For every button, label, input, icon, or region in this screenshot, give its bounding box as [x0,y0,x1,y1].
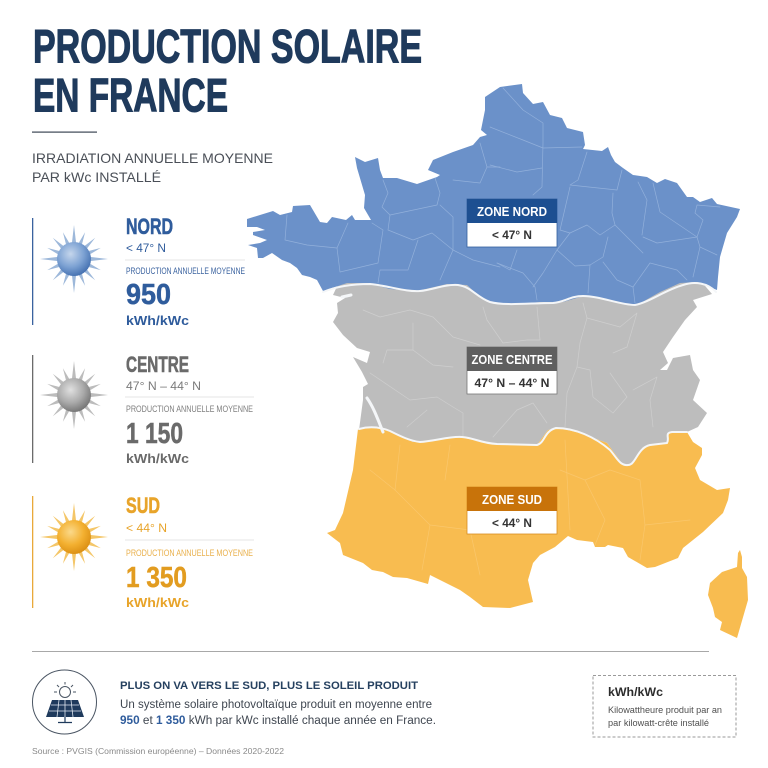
subtitle: IRRADIATION ANNUELLE MOYENNE [32,150,273,166]
panel: zone sud: < 44° N [126,521,167,535]
department borders centre [363,303,657,437]
department borders sud [370,440,690,575]
panel: zone nord: kWh/kWc [126,313,189,328]
title: EN FRANCE [33,68,228,122]
panel: zone nord: < 47° N [126,241,166,255]
legend box: kWh/kWc: kWh/kWc [608,685,663,699]
subtitle: PAR kWc INSTALLÉ [32,169,161,185]
icon: grey sun [40,361,108,429]
map of France [247,84,748,638]
panel: zone sud [32,493,254,610]
text block: conclusion: PLUS ON VA VERS LE SUD, PLUS LE SOLEIL PRODUIT [120,680,418,692]
panel: zone sud: SUD [126,493,160,518]
label: zone nord [467,199,557,247]
panel: zone centre: CENTRE [126,352,189,377]
region: zone centre [333,280,712,465]
panel: zone centre: 1 150 [126,418,183,450]
label: zone nord: < 47° N [492,228,532,242]
text block: conclusion: Un système solaire photovoltaïque produit en moyenne entre [120,699,432,711]
label: zone sud: < 44° N [492,516,532,530]
title: PRODUCTION SOLAIRE [33,20,422,72]
panel: zone nord [32,214,245,328]
label: zone sud: ZONE SUD [482,493,542,507]
legend box: kWh/kWc: par kilowatt-crête installé [608,718,709,728]
panel: zone sud: PRODUCTION ANNUELLE MOYENNE [126,548,253,559]
zone boundaries [323,283,716,465]
region: corse [708,550,748,638]
subtitle [32,150,273,185]
panel: zone centre: kWh/kWc [126,451,189,466]
department borders nord [285,88,720,303]
panel: zone nord: NORD [126,214,173,239]
panel: zone nord: PRODUCTION ANNUELLE MOYENNE [126,266,245,277]
label: zone centre: ZONE CENTRE [472,353,552,367]
panel: zone centre: 47° N – 44° N [126,379,201,393]
icon: solar panel [32,670,96,734]
label: zone sud [467,487,557,534]
icon: blue sun [40,225,108,293]
region: zone sud [327,427,730,608]
text block: conclusion: 950 et 1 350 kWh par kWc installé chaque année en France. [120,715,436,727]
label: zone nord: ZONE NORD [477,205,547,219]
region: zone nord [247,84,740,305]
legend box: kWh/kWc [593,676,736,737]
panel: zone nord: 950 [126,279,171,311]
text block: conclusion [120,680,436,727]
panel: zone centre [32,352,254,466]
source: Source : PVGIS (Commission européenne) – Données 2020-2022 [32,746,284,756]
panel: zone centre: PRODUCTION ANNUELLE MOYENNE [126,404,253,415]
label: zone centre: 47° N – 44° N [474,376,550,390]
panel: zone sud: kWh/kWc [126,595,189,610]
title [33,20,422,122]
legend box: kWh/kWc: Kilowattheure produit par an [608,705,722,715]
panel: zone sud: 1 350 [126,562,187,594]
label: zone centre [467,347,557,394]
icon: yellow sun [40,503,108,571]
